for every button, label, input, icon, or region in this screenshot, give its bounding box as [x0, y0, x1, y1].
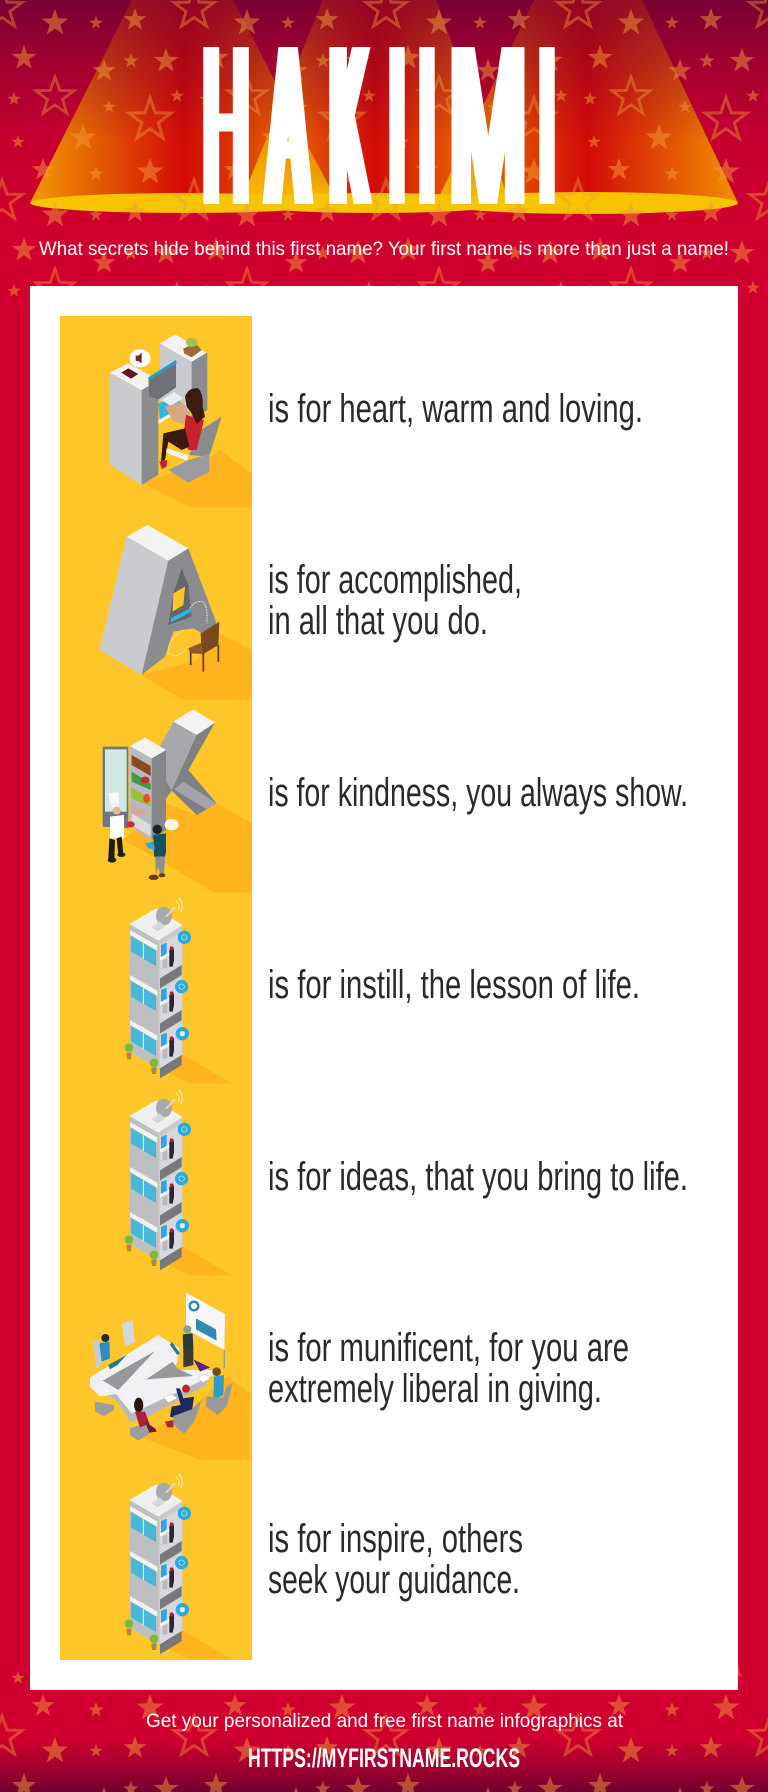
text: M lines: extremely liberal in giving. [268, 1367, 602, 1411]
text: M lines [268, 1326, 629, 1411]
title: I [388, 0, 406, 253]
icon: letter A desk [99, 525, 252, 700]
footer url: HTTPS://MYFIRSTNAME.ROCKS [248, 1743, 520, 1773]
icon: letter M meeting table [90, 1293, 250, 1460]
icon: letter I building 1 [125, 898, 232, 1083]
title [203, 0, 556, 253]
icon: letter I building 3 [125, 1474, 232, 1659]
text: M lines: is for munificent, for you are [268, 1326, 629, 1370]
spotlight top fade [30, 0, 738, 203]
title: A [269, 0, 307, 253]
title: K [331, 0, 367, 253]
icon: letter I building 2 [125, 1090, 232, 1275]
title: M [450, 0, 526, 253]
spotlights [30, 0, 738, 214]
title: I [418, 0, 436, 253]
text: A lines: in all that you do. [268, 599, 488, 643]
panel: yellow illustration column [60, 316, 252, 1660]
spotlight overlap right [436, 116, 510, 203]
star pattern bottom [0, 1665, 768, 1792]
panel: white content card [30, 286, 738, 1690]
icon: letter H office [110, 334, 252, 507]
icon: letter K fridge [103, 709, 252, 892]
spotlight: left cone [30, 0, 338, 203]
text: A lines: is for accomplished, [268, 558, 522, 602]
footer note: Get your personalized and free first name infographics at [146, 1711, 624, 1732]
text: I lines 3: is for inspire, others [268, 1517, 523, 1561]
title: I [538, 0, 556, 253]
spotlight overlap left [240, 99, 338, 203]
text: I lines 3 [268, 1517, 523, 1602]
spotlight: middle cone [240, 0, 510, 203]
text: H line: is for heart, warm and loving. [268, 387, 643, 431]
spotlight: right cone [436, 0, 738, 203]
text: A lines [268, 558, 522, 643]
text: I lines 3: seek your guidance. [268, 1558, 520, 1602]
star pattern top [0, 0, 768, 300]
title: H [203, 0, 249, 253]
subtitle: What secrets hide behind this first name? Your first name is more than just a name! [39, 239, 729, 260]
text: I line: is for instill, the lesson of life. [268, 963, 640, 1007]
stage pools of light [30, 192, 738, 214]
